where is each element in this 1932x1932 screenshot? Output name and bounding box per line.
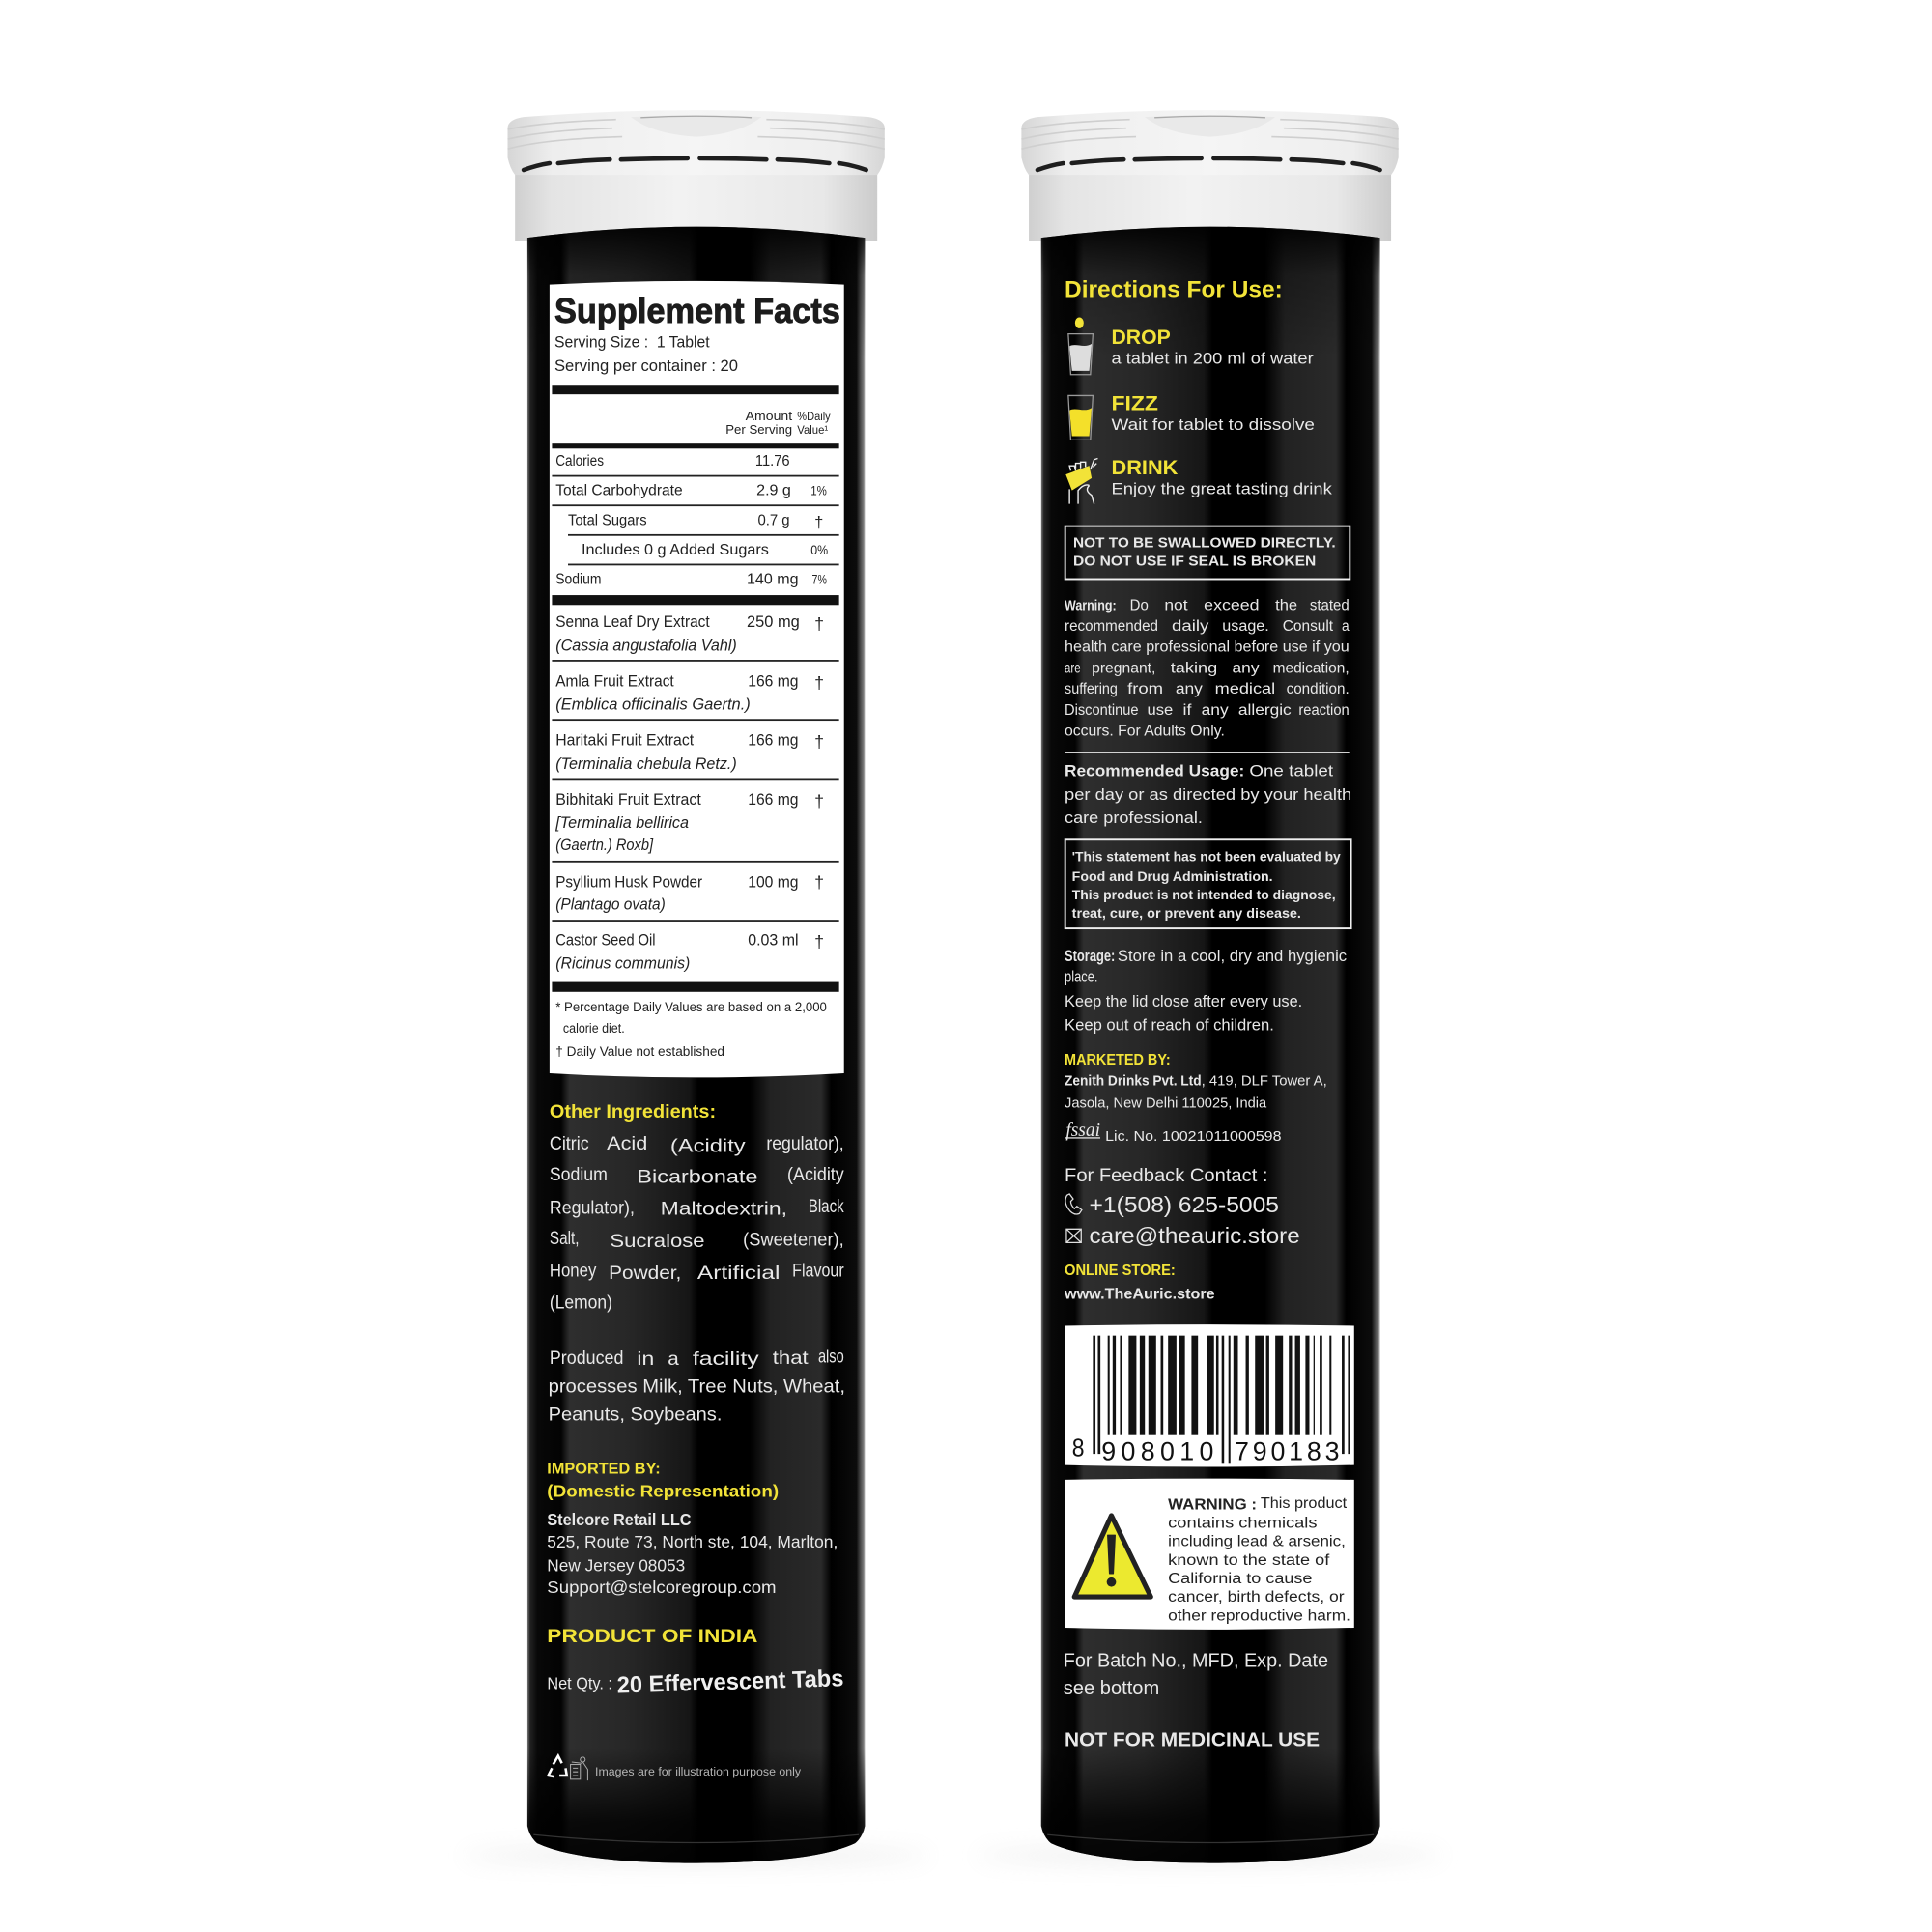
- nutrition rows: 1%: [810, 483, 827, 498]
- nutrition rows: 140 mg: [747, 572, 799, 588]
- floor shadows: [462, 1848, 1444, 1863]
- text block: ingredients list: Maltodextrin,: [661, 1199, 787, 1220]
- batch note: [1064, 1651, 1328, 1699]
- text block: recommended usage: [1065, 762, 1351, 827]
- batch note: For Batch No., MFD, Exp. Date: [1064, 1651, 1328, 1672]
- nutrition rows: †: [814, 513, 823, 531]
- text block: allergen note: in: [637, 1349, 654, 1370]
- not for medicinal use: NOT FOR MEDICINAL USE: [1065, 1729, 1320, 1750]
- text block: ingredients list: (Acidity: [670, 1136, 746, 1157]
- text block: ingredients list: Black: [809, 1196, 844, 1217]
- icon: fizzing glass: [1068, 395, 1093, 440]
- text block: ingredients list: Honey: [550, 1260, 596, 1281]
- ingredient rows: 166 mg: [748, 731, 799, 750]
- text block: ingredients list: Bicarbonate: [637, 1166, 757, 1187]
- ingredient rows: (Emblica officinalis Gaertn.): [555, 696, 751, 714]
- text block: warning: not: [1164, 597, 1188, 613]
- ingredient rows: 0.03 ml: [748, 930, 799, 949]
- text block: storage: Store in a cool, dry and hygienic: [1118, 947, 1347, 965]
- text block: ingredients list: Powder,: [609, 1263, 681, 1284]
- text block: storage: place.: [1065, 968, 1097, 986]
- text block: allergen note: Peanuts, Soybeans.: [549, 1405, 722, 1426]
- tube: right body: [1021, 110, 1399, 1863]
- table header and rules: [552, 385, 839, 992]
- nutrition rows: 11.76: [755, 453, 790, 469]
- servings per container: Serving per container : 20: [554, 356, 738, 375]
- ingredient rows: 100 mg: [748, 872, 799, 891]
- text block: storage: Storage:: [1065, 947, 1115, 965]
- nutrition rows: [555, 453, 828, 588]
- origin: PRODUCT OF INDIA: [547, 1626, 757, 1647]
- heading: directions for use: Directions For Use:: [1065, 276, 1283, 301]
- ingredient rows: Senna Leaf Dry Extract: [555, 612, 710, 631]
- step: drop: [1068, 317, 1314, 375]
- warning text: This product: [1261, 1495, 1348, 1512]
- text block: ingredients list: (Acidity: [787, 1164, 844, 1185]
- text block: warning: [1065, 597, 1350, 739]
- text block: warning: any: [1176, 681, 1203, 697]
- callout: FDA statement: treat, cure, or prevent any disease.: [1072, 905, 1301, 921]
- online store: [1064, 1263, 1215, 1302]
- ingredient rows: 250 mg: [747, 612, 800, 631]
- text block: ingredients list: Regulator),: [550, 1197, 635, 1218]
- text block: ingredients list: (Lemon): [550, 1293, 612, 1314]
- footnotes: calorie diet.: [563, 1021, 625, 1036]
- barcode: 790183: [1235, 1436, 1339, 1465]
- ingredient rows: †: [814, 673, 824, 693]
- ingredient rows: (Ricinus communis): [555, 954, 690, 973]
- step: drop: a tablet in 200 ml of water: [1112, 349, 1314, 367]
- callout: FDA statement: This product is not intended to diagnose,: [1072, 887, 1336, 902]
- feedback contact: care@theauric.store: [1090, 1223, 1300, 1248]
- callout: FDA statement: Food and Drug Administration.: [1072, 868, 1273, 884]
- text block: warning: occurs. For Adults Only.: [1065, 723, 1225, 739]
- text block: warning: Do: [1130, 597, 1149, 613]
- icon: glass with tablet: [1068, 317, 1093, 375]
- feedback contact: +1(508) 625-5005: [1090, 1192, 1279, 1217]
- text block: ingredients list: regulator),: [766, 1133, 844, 1154]
- callout: FDA statement: [1065, 839, 1351, 928]
- text block: warning: recommended: [1065, 618, 1158, 635]
- panel: supplement facts label: [550, 281, 844, 1077]
- text block: recommended usage: per day or as directed by your health: [1065, 785, 1351, 804]
- warning text: WARNING :: [1168, 1496, 1257, 1513]
- text block: allergen note: also: [818, 1347, 844, 1368]
- net quantity: 20 Effervescent Tabs: [616, 1665, 844, 1699]
- text block: allergen note: [549, 1347, 845, 1426]
- callout: FDA statement: 'This statement has not been evaluated by: [1072, 849, 1341, 865]
- ingredient rows: 166 mg: [748, 671, 799, 690]
- ingredient rows: †: [814, 732, 824, 752]
- ingredient rows: (Plantago ovata): [555, 895, 666, 913]
- text block: warning: are: [1065, 660, 1081, 676]
- importer details: (Domestic Representation): [547, 1482, 779, 1501]
- nutrition rows: 2.9 g: [756, 483, 791, 499]
- footnotes: * Percentage Daily Values are based on a 2,000: [555, 1000, 827, 1014]
- step: drink: Enjoy the great tasting drink: [1112, 479, 1333, 497]
- marketer details: Zenith Drinks Pvt. Ltd: [1065, 1074, 1202, 1090]
- text block: recommended usage: One tablet: [1249, 762, 1334, 781]
- step: fizz: [1068, 391, 1315, 440]
- footnotes: † Daily Value not established: [555, 1044, 724, 1059]
- callout: do not swallow: [1065, 526, 1350, 579]
- text block: warning: medical: [1215, 681, 1275, 697]
- marketer details: [1065, 1052, 1327, 1145]
- warning text: including lead & arsenic,: [1168, 1534, 1346, 1550]
- importer details: Stelcore Retail LLC: [547, 1510, 692, 1529]
- text block: ingredients list: Artificial: [697, 1263, 780, 1284]
- step: fizz: FIZZ: [1112, 391, 1158, 415]
- importer details: IMPORTED BY:: [547, 1462, 661, 1478]
- nutrition rows: Sodium: [555, 572, 601, 588]
- importer details: [547, 1462, 838, 1597]
- text block: warning: any: [1233, 660, 1260, 676]
- nutrition rows: 0%: [810, 542, 828, 557]
- text block: warning: stated: [1310, 597, 1350, 613]
- icon: warning triangle: [1074, 1516, 1151, 1597]
- text block: warning: pregnant,: [1092, 660, 1155, 676]
- table header and rules: %Daily: [797, 410, 832, 423]
- ingredient rows: †: [814, 873, 824, 893]
- feedback contact: For Feedback Contact :: [1065, 1165, 1267, 1186]
- ingredient rows: (Terminalia chebula Retz.): [555, 754, 737, 773]
- warning text: cancer, birth defects, or: [1168, 1589, 1345, 1605]
- text block: warning: suffering: [1065, 681, 1118, 697]
- text block: warning: Consult: [1283, 618, 1334, 635]
- text block: storage: [1065, 947, 1347, 1034]
- disclaimer: Images are for illustration purpose only: [595, 1765, 802, 1778]
- text block: warning: daily: [1172, 618, 1208, 635]
- warning text: [1168, 1495, 1350, 1624]
- text block: ingredients list: Salt,: [550, 1228, 579, 1249]
- text block: recommended usage: Recommended Usage:: [1065, 762, 1244, 781]
- feedback contact: [1065, 1165, 1300, 1248]
- text block: ingredients list: Acid: [607, 1133, 647, 1154]
- text block: allergen note: processes Milk, Tree Nuts, Wheat,: [549, 1376, 845, 1397]
- table header and rules: Value¹: [797, 423, 828, 437]
- icon: tidy man bin: [571, 1757, 587, 1780]
- table header and rules: Per Serving: [725, 422, 792, 437]
- text block: warning: condition.: [1287, 681, 1350, 697]
- warning text: California to cause: [1168, 1571, 1313, 1587]
- ingredient rows: 166 mg: [748, 790, 799, 809]
- ingredient rows: †: [814, 932, 824, 952]
- text block: ingredients list: Flavour: [792, 1260, 844, 1281]
- text block: warning: reaction: [1298, 702, 1350, 719]
- text block: warning: any: [1202, 702, 1229, 719]
- nutrition rows: Includes 0 g Added Sugars: [582, 542, 769, 558]
- text block: ingredients list: [550, 1133, 844, 1314]
- ingredient rows: (Gaertn.) Roxb]: [555, 836, 653, 854]
- text block: warning: the: [1275, 597, 1297, 613]
- ingredient rows: [554, 612, 824, 973]
- text block: ingredients list: Citric: [550, 1133, 589, 1154]
- heading: supplement facts: Supplement Facts: [554, 292, 840, 330]
- barcode: 908010: [1101, 1436, 1213, 1465]
- warning text: contains chemicals: [1168, 1516, 1318, 1532]
- ingredient rows: Psyllium Husk Powder: [555, 872, 702, 891]
- barcode: [1065, 1324, 1354, 1466]
- text block: warning: allergic: [1238, 702, 1292, 719]
- step: drop: DROP: [1112, 325, 1171, 349]
- text block: warning: health care professional before use if you: [1065, 639, 1350, 656]
- text block: warning: use: [1148, 702, 1173, 719]
- text block: allergen note: facility: [693, 1349, 759, 1370]
- text block: allergen note: a: [668, 1349, 679, 1370]
- serving size: Serving Size : 1 Tablet: [554, 333, 710, 352]
- heading: other ingredients: Other Ingredients:: [550, 1101, 716, 1122]
- text block: ingredients list: Sucralose: [610, 1231, 705, 1252]
- icon: hand drinking: [1065, 458, 1097, 504]
- text block: allergen note: that: [773, 1348, 809, 1369]
- online store: www.TheAuric.store: [1064, 1286, 1215, 1302]
- text block: warning: Warning:: [1065, 598, 1117, 613]
- nutrition rows: Total Sugars: [568, 512, 647, 528]
- ingredient rows: Amla Fruit Extract: [555, 671, 674, 690]
- ingredient rows: Castor Seed Oil: [555, 930, 656, 949]
- importer details: Support@stelcoregroup.com: [547, 1577, 777, 1597]
- nutrition rows: Calories: [555, 453, 604, 469]
- net quantity: Net Qty. :: [547, 1674, 612, 1693]
- step: drink: DRINK: [1112, 455, 1179, 479]
- marketer details: , 419, DLF Tower A,: [1202, 1074, 1327, 1090]
- warning text: other reproductive harm.: [1168, 1607, 1350, 1624]
- online store: ONLINE STORE:: [1065, 1263, 1176, 1279]
- nutrition rows: 0.7 g: [757, 512, 790, 528]
- icon: envelope: [1066, 1229, 1081, 1242]
- warning text: known to the state of: [1168, 1552, 1330, 1569]
- step: drink: [1065, 455, 1333, 504]
- icon: phone: [1065, 1194, 1082, 1214]
- text block: storage: Keep the lid close after every use.: [1065, 992, 1302, 1010]
- nutrition rows: Total Carbohydrate: [555, 483, 683, 499]
- text block: warning: from: [1127, 681, 1163, 697]
- panel: prop 65 warning label: [1065, 1479, 1354, 1630]
- text block: warning: medication,: [1273, 660, 1350, 676]
- text block: ingredients list: (Sweetener),: [743, 1230, 844, 1251]
- callout: do not swallow: DO NOT USE IF SEAL IS BROKEN: [1073, 554, 1316, 569]
- text block: warning: Discontinue: [1065, 702, 1139, 719]
- text block: storage: Keep out of reach of children.: [1065, 1015, 1274, 1034]
- batch note: see bottom: [1064, 1678, 1159, 1699]
- ingredient rows: (Cassia angustafolia Vahl): [555, 636, 737, 654]
- tube: left body: [508, 110, 885, 1863]
- text block: recommended usage: care professional.: [1065, 809, 1203, 827]
- barcode: 8: [1072, 1435, 1084, 1463]
- icon: recycle: [549, 1756, 567, 1776]
- nutrition rows: 7%: [812, 572, 827, 587]
- callout: do not swallow: NOT TO BE SWALLOWED DIRECTLY.: [1073, 535, 1336, 551]
- table header and rules: Amount: [746, 409, 793, 423]
- ingredient rows: †: [814, 614, 824, 634]
- text block: allergen note: Produced: [550, 1348, 623, 1369]
- text block: warning: if: [1182, 702, 1192, 719]
- marketer details: fssai: [1065, 1120, 1100, 1141]
- text block: ingredients list: Sodium: [550, 1164, 608, 1185]
- text block: warning: usage.: [1222, 618, 1269, 635]
- step: fizz: Wait for tablet to dissolve: [1112, 415, 1315, 434]
- marketer details: Lic. No. 10021011000598: [1105, 1129, 1282, 1145]
- importer details: 525, Route 73, North ste, 104, Marlton,: [547, 1532, 838, 1551]
- marketer details: MARKETED BY:: [1065, 1052, 1171, 1068]
- footnotes: [555, 1000, 827, 1059]
- ingredient rows: Haritaki Fruit Extract: [555, 731, 694, 750]
- text block: warning: exceed: [1204, 597, 1260, 613]
- ingredient rows: †: [814, 791, 824, 810]
- text block: warning: taking: [1171, 660, 1217, 676]
- marketer details: Jasola, New Delhi 110025, India: [1065, 1096, 1267, 1112]
- text block: warning: a: [1342, 618, 1350, 635]
- importer details: New Jersey 08053: [547, 1555, 685, 1575]
- ingredient rows: [Terminalia bellirica: [554, 813, 689, 832]
- ingredient rows: Bibhitaki Fruit Extract: [555, 790, 701, 809]
